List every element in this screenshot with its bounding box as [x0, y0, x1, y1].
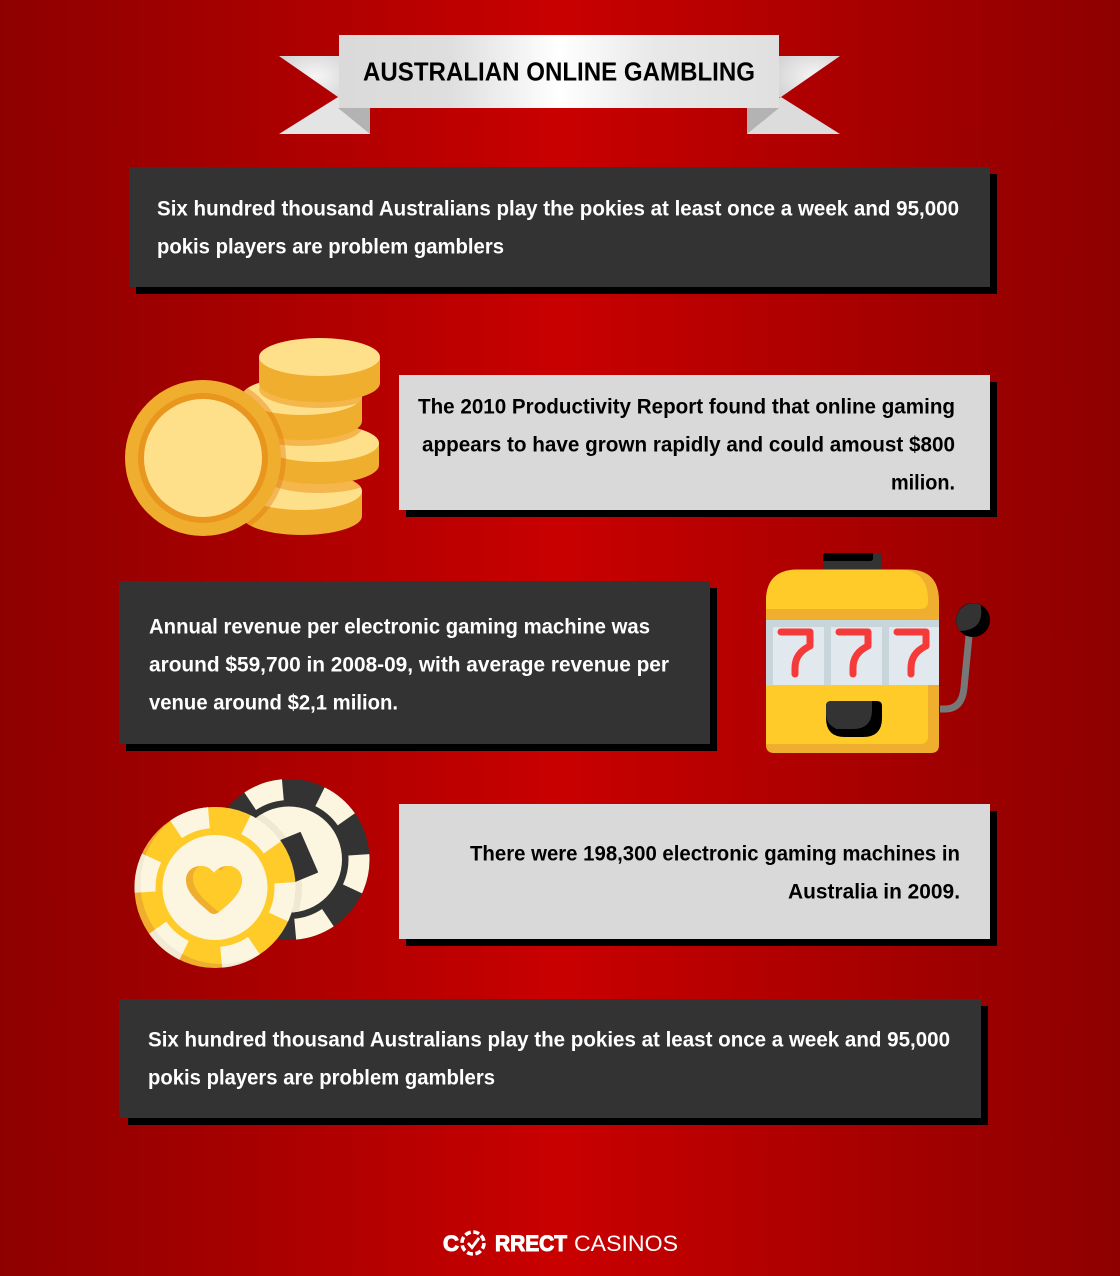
panel: annual revenue: Annual revenue per electronic gaming machine was [149, 616, 650, 639]
panel: top fact [129, 167, 997, 294]
panel: machine count: There were 198,300 electronic gaming machines in [470, 843, 960, 866]
panel: productivity report [399, 375, 997, 517]
panel: bottom fact: pokis players are problem gamblers [148, 1067, 495, 1090]
title: AUSTRALIAN ONLINE GAMBLING [363, 56, 755, 86]
panel: machine count: Australia in 2009. [788, 881, 960, 904]
panel: productivity report: The 2010 Productivity Report found that online gaming [418, 396, 955, 419]
logo: Correct Casinos: C [443, 1231, 459, 1256]
panel: annual revenue [119, 581, 717, 751]
title ribbon [279, 35, 840, 134]
panel: machine count [399, 804, 997, 946]
panel: bottom fact: Six hundred thousand Australians play the pokies at least once a week and 95,000 [148, 1029, 950, 1052]
panel: annual revenue: around $59,700 in 2008-09, with average revenue per [149, 654, 669, 677]
panel: productivity report: appears to have grown rapidly and could amoust $800 [422, 434, 955, 457]
panel: productivity report: milion. [891, 472, 955, 495]
panel: top fact: pokis players are problem gamblers [157, 236, 504, 259]
logo: Correct Casinos: RRECT [495, 1231, 568, 1256]
icon: coin stack [120, 338, 380, 541]
panel: annual revenue: venue around $2,1 milion. [149, 692, 398, 715]
logo: Correct Casinos: CASINOS [574, 1231, 678, 1256]
logo: Correct Casinos [443, 1231, 678, 1256]
panel: top fact: Six hundred thousand Australians play the pokies at least once a week and 95,000 [157, 198, 959, 221]
panel: bottom fact [119, 999, 988, 1125]
icon: slot machine [766, 553, 990, 753]
icon: casino chips [128, 779, 370, 974]
